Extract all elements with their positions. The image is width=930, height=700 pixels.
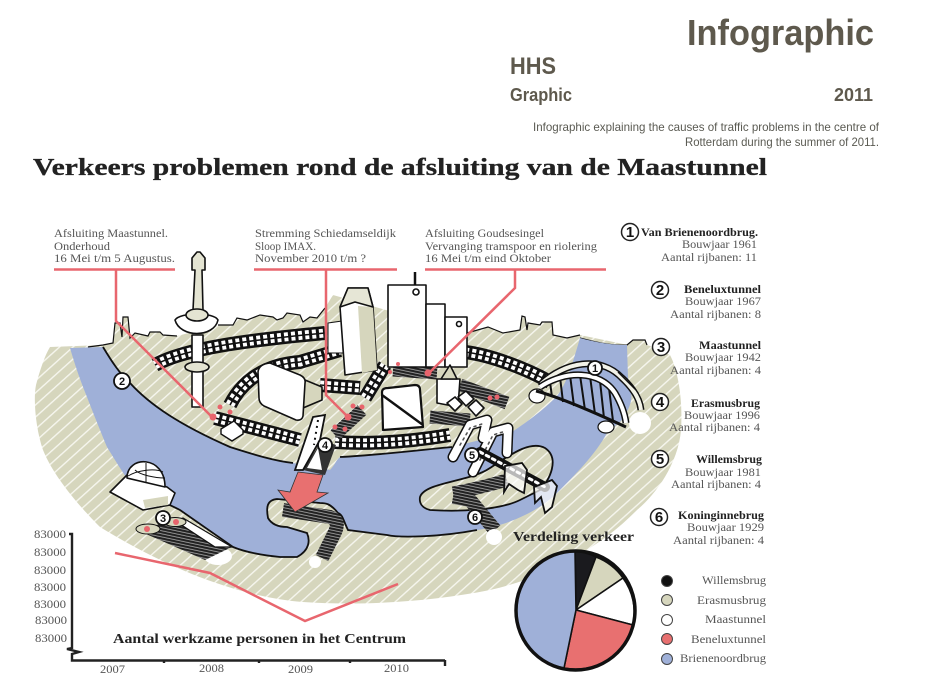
item 1: [622, 224, 758, 264]
river Maas: [70, 338, 631, 557]
pie legend: Willemsbrug: [702, 575, 766, 587]
item 2: Beneluxtunnel: [684, 282, 762, 296]
callout: Maastunnel closure: Onderhoud: [54, 241, 110, 253]
item 5: Bouwjaar 1981: [685, 467, 761, 479]
Willems bridge pylons: [453, 420, 545, 487]
item 6: Koninginnebrug: [678, 508, 764, 522]
item 4: Bouwjaar 1996: [684, 410, 760, 422]
small cubes: [447, 391, 484, 416]
Euromast tower: [175, 252, 218, 407]
Van Brienenoord bridge: [529, 364, 651, 434]
item 3: Aantal rijbanen: 4: [670, 365, 761, 377]
item 3: Maastunnel: [699, 338, 762, 352]
item 6: 6: [655, 509, 663, 526]
item 6: Bouwjaar 1929: [687, 522, 764, 534]
item 3: Bouwjaar 1942: [685, 352, 761, 364]
peninsula: [420, 446, 553, 511]
item 5: 5: [656, 451, 664, 468]
arrow: traffic closure: [278, 472, 328, 512]
item 4: [652, 394, 760, 434]
callout: Schiedamseldijk: Stremming Schiedamseldijk: [255, 228, 396, 240]
skyline outline: [88, 308, 647, 347]
item 6: Aantal rijbanen: 4: [673, 535, 764, 547]
bridge list: [622, 224, 764, 547]
callout: Schiedamseldijk: [254, 228, 397, 417]
map number markers: 4: [322, 440, 329, 452]
callout: Goudsesingel: [425, 228, 606, 373]
small building bank: [221, 421, 243, 441]
description text: Rotterdam during the summer of 2011.: [685, 135, 879, 149]
map: Rotterdam city illustration: [35, 252, 681, 604]
item 2: 2: [656, 282, 664, 299]
cone building: [437, 365, 460, 407]
y axis labels: 83000: [34, 547, 66, 559]
data line: [115, 553, 398, 621]
item 4: Aantal rijbanen: 4: [669, 422, 760, 434]
item 1: Bouwjaar 1961: [682, 239, 757, 251]
header: HHS: HHS: [510, 53, 556, 80]
map number markers: [114, 361, 602, 525]
item 3: [652, 338, 762, 377]
dome building: [110, 462, 175, 510]
callout: Maastunnel closure: Afsluiting Maastunnel.: [54, 228, 168, 240]
Maastunnel entrance: [136, 518, 232, 565]
item 2: [652, 282, 762, 321]
callout: Maastunnel closure: [54, 228, 213, 418]
map number markers: 2: [119, 376, 125, 388]
item 5: Willemsbrug: [696, 452, 762, 466]
central building: [382, 385, 423, 430]
description text: Infographic explaining the causes of traffic problems in the centre of: [533, 120, 880, 134]
item 1: Van Brienenoordbrug.: [641, 225, 758, 239]
Koninginne bridge road: [453, 497, 502, 545]
office block: [258, 363, 322, 420]
chart title: Aantal werkzame personen in het Centrum: [113, 631, 407, 646]
city roads: [155, 333, 550, 493]
x axis labels: 2009: [288, 664, 313, 676]
axes: [67, 534, 445, 666]
map number markers: 1: [592, 363, 598, 375]
x axis labels: [100, 663, 409, 676]
callout: Schiedamseldijk: Sloop IMAX.: [255, 241, 316, 253]
pie chart title: Verdeling verkeer: [513, 529, 634, 544]
lattice towers: [504, 463, 557, 513]
main heading: Verkeers problemen rond de afsluiting van de Maastunnel: [33, 155, 767, 181]
map number markers: 6: [472, 512, 478, 524]
y axis labels: 83000: [34, 599, 66, 611]
item 5: Aantal rijbanen: 4: [671, 479, 761, 491]
item 1: Aantal rijbanen: 11: [661, 252, 757, 264]
peninsula road: [283, 510, 337, 568]
y axis labels: 83000: [35, 615, 67, 627]
y axis labels: 83000: [35, 633, 67, 645]
header: Infographic title: Infographic: [687, 12, 874, 53]
y axis labels: 83000: [34, 529, 66, 541]
item 2: Bouwjaar 1967: [685, 296, 761, 308]
y axis labels: 83000: [34, 582, 66, 594]
line chart: [34, 529, 445, 676]
y axis labels: [34, 529, 67, 645]
header: year: 2011: [834, 85, 873, 105]
x axis labels: 2010: [384, 663, 409, 675]
pie legend: Maastunnel: [705, 614, 766, 626]
river banks: [103, 347, 477, 557]
item 1: 1: [626, 224, 634, 241]
callout: Schiedamseldijk: November 2010 t/m ?: [255, 253, 366, 265]
callout: Goudsesingel: 16 Mei t/m eind Oktober: [425, 253, 551, 265]
item 4: Erasmusbrug: [691, 396, 760, 410]
callout: Goudsesingel: Vervanging tramspoor en riolering: [425, 241, 597, 253]
pie legend: Beneluxtunnel: [691, 634, 766, 646]
land with skyline: [35, 295, 681, 604]
item 3: 3: [657, 339, 665, 356]
map number markers: 5: [469, 450, 475, 462]
pie chart: [516, 551, 635, 670]
callout: Maastunnel closure: 16 Mei t/m 5 Augustus.: [54, 253, 175, 265]
callout: Goudsesingel: Afsluiting Goudsesingel: [425, 228, 544, 240]
skyscrapers: [328, 272, 467, 375]
y axis labels: 83000: [34, 565, 66, 577]
x axis labels: 2007: [100, 664, 125, 676]
item 2: Aantal rijbanen: 8: [670, 309, 761, 321]
Erasmus bridge: [295, 415, 336, 475]
x axis labels: 2008: [199, 663, 224, 675]
item 6: [650, 508, 764, 547]
pie legend: Brienenoordbrug: [680, 653, 766, 665]
header: Graphic: Graphic: [510, 85, 572, 105]
item 4: 4: [656, 394, 665, 411]
map number markers: 3: [160, 513, 166, 525]
item 5: [652, 450, 762, 491]
pie legend: [662, 575, 766, 665]
description text: [533, 120, 880, 149]
incident markers: [144, 362, 500, 532]
pie legend: Erasmusbrug: [697, 595, 766, 607]
